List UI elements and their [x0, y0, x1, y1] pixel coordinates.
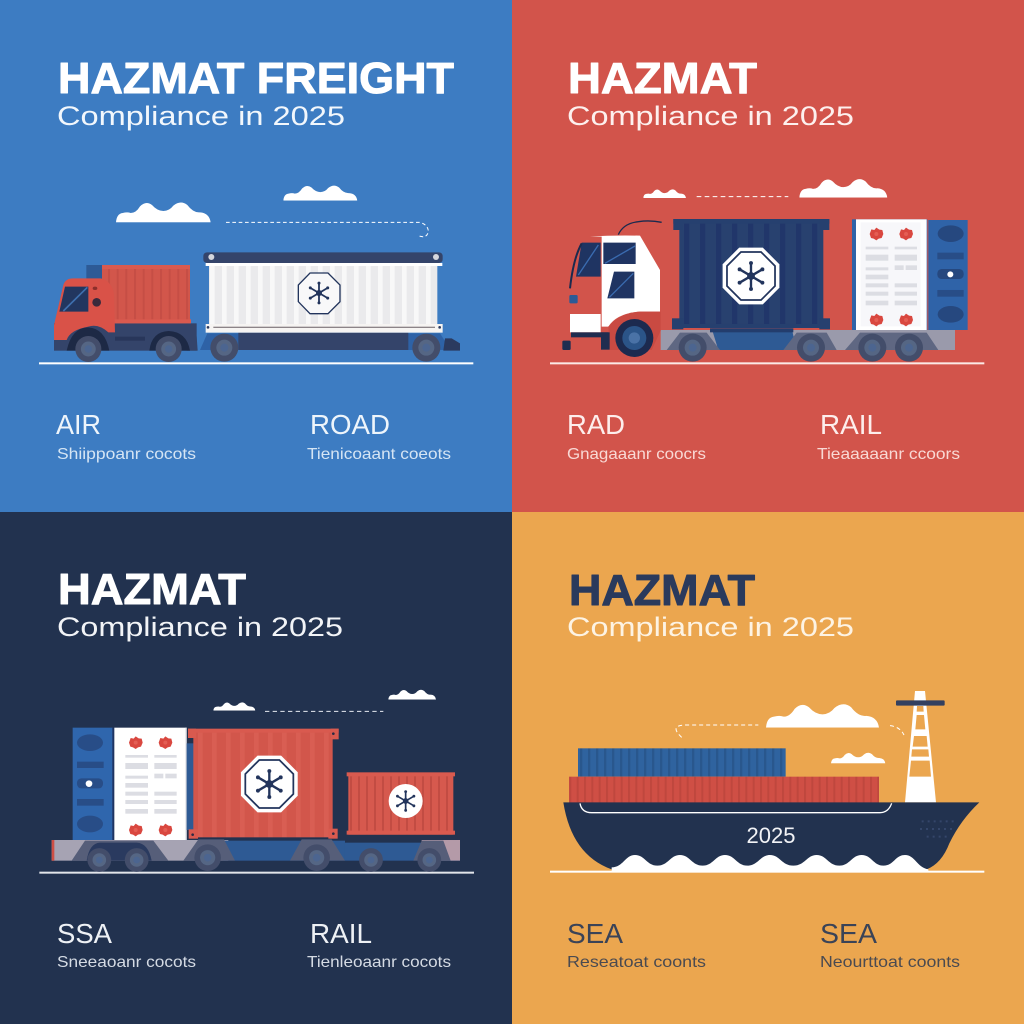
red containers: [569, 777, 879, 803]
ground line: [39, 362, 473, 364]
title: HAZMAT: [568, 54, 757, 103]
white truck cab: [562, 221, 662, 357]
column label: rail: Tieaaaaanr ccoors: [817, 446, 960, 463]
ground line: [550, 871, 984, 873]
column label: air: [56, 409, 196, 463]
cloud small: [643, 189, 686, 198]
title: HAZMAT: [569, 566, 755, 615]
illustration: truck and white container: [39, 186, 473, 364]
panel: navy, hazmat: [0, 512, 512, 1024]
subtitle: Compliance in 2025: [567, 101, 854, 131]
wheels: [87, 844, 441, 872]
tower crossbar: [896, 700, 945, 706]
illustration: document trailer, red containers: [39, 690, 474, 874]
column label: air: AIR: [56, 409, 101, 440]
column label: rail: Tienleoaanr cocots: [307, 954, 451, 971]
column label: sea right: SEA: [820, 918, 877, 949]
subtitle: Compliance in 2025: [57, 101, 345, 131]
column label: rail: [307, 918, 451, 971]
hull year: 2025: [747, 823, 795, 848]
document sheet: [114, 728, 194, 840]
column label: ssa: SSA: [57, 918, 112, 949]
hazard emblem: [241, 756, 298, 812]
title: HAZMAT: [58, 565, 246, 614]
column label: ssa: [57, 918, 196, 971]
column label: sea right: [820, 918, 960, 971]
waves: [612, 855, 928, 872]
column label: rad: [567, 409, 706, 463]
dashed route: [697, 195, 788, 198]
white container trailer: [200, 252, 460, 362]
panel: blue, hazmat freight: [0, 0, 512, 512]
column label: ssa: Sneeaoanr cocots: [57, 954, 196, 971]
dashed route: [265, 710, 383, 713]
column label: air: Shiippoanr cocots: [57, 446, 196, 463]
panel: red, hazmat: [512, 0, 1024, 512]
ship tower: [905, 691, 936, 802]
cloud large: [799, 179, 887, 198]
column label: road: Tienicoaant coeots: [307, 446, 451, 463]
cloud left: [116, 202, 211, 222]
column label: sea left: Reseatoat coonts: [567, 954, 706, 971]
subtitle: Compliance in 2025: [57, 612, 343, 642]
deck line: [580, 803, 892, 813]
dashed route: [226, 222, 428, 237]
cloud small: [831, 753, 885, 763]
blue containers: [578, 748, 786, 777]
hazard emblem: [723, 248, 779, 304]
large red container: [188, 729, 339, 839]
column label: sea left: SEA: [567, 918, 623, 949]
column label: rail: RAIL: [820, 409, 882, 440]
title: HAZMAT FREIGHT: [58, 54, 454, 103]
column label: rail: RAIL: [310, 918, 372, 949]
cloud small: [213, 702, 255, 711]
column label: sea left: [567, 918, 706, 971]
document trailer: [852, 219, 968, 330]
column label: road: ROAD: [310, 409, 390, 440]
column label: road: [307, 409, 451, 463]
chassis: [52, 839, 460, 861]
navy container: [672, 219, 830, 329]
blue document panel: [73, 728, 114, 840]
small red container: [347, 772, 455, 835]
subtitle: Compliance in 2025: [567, 612, 854, 642]
ground line: [39, 872, 474, 874]
wheels: [679, 334, 923, 362]
cloud large: [766, 704, 879, 728]
chassis: [661, 328, 955, 350]
panel: orange, sea: [512, 512, 1024, 1024]
red truck: [54, 265, 198, 362]
cloud right: [388, 690, 436, 700]
column label: rad: RAD: [567, 409, 625, 440]
cloud right: [283, 186, 357, 201]
ground line: [550, 362, 984, 364]
column label: rad: Gnagaaanr coocrs: [567, 446, 706, 463]
illustration: white truck, navy container, document trailer: [550, 179, 984, 364]
dashed route: [676, 725, 904, 737]
illustration: container ship: [550, 691, 984, 873]
column label: sea right: Neourttoat coonts: [820, 954, 960, 971]
hull dots: [920, 821, 957, 837]
column label: rail: [817, 409, 960, 463]
hull: [563, 802, 979, 869]
